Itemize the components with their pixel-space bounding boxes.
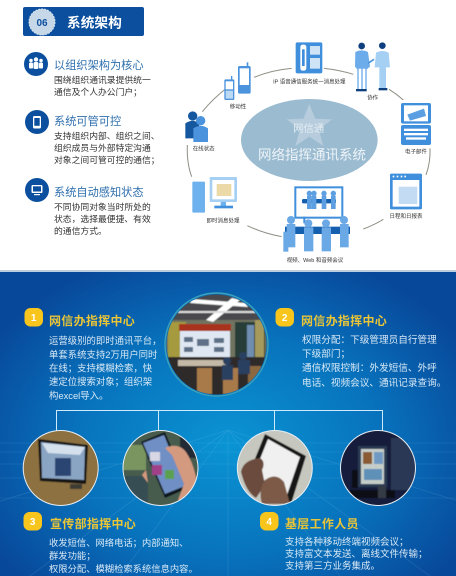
feature: organization core — [24, 52, 151, 97]
photo: desktop computer — [340, 428, 416, 508]
feature: organization core: 通信及个人办公门户； — [54, 86, 142, 97]
photo: smartphone in hand — [122, 430, 198, 506]
icon: collaboration people — [355, 42, 390, 91]
panel 3: publicity department: 收发短信、网络电话；内部通知、 — [49, 537, 188, 548]
badge 4 — [260, 512, 278, 530]
feature: organization core: 以组织架构为核心 — [54, 58, 144, 72]
panel 2: command center: 通信权限控制：外发短信、外呼 — [302, 362, 437, 374]
photo: video screen — [22, 430, 99, 506]
icon: email device — [401, 103, 431, 145]
photo: tablet typing — [236, 430, 313, 506]
icon: monitor — [25, 178, 49, 202]
connector lines — [56, 410, 382, 431]
panel 2: command center: 下级部门； — [302, 348, 350, 360]
badge 1: 1 — [31, 313, 37, 324]
panel 1: command center: 运营级别的即时通讯平台， — [49, 335, 162, 346]
label: email: 电子邮件 — [405, 148, 427, 156]
feature: controllable — [25, 110, 160, 165]
icon: video conference — [283, 187, 350, 252]
panel 2: command center — [276, 308, 446, 389]
badge 2: 2 — [282, 313, 288, 324]
central ellipse — [241, 99, 378, 181]
feature: presence awareness: 的通信方式。 — [54, 225, 107, 236]
photo: control room — [164, 292, 269, 397]
ring connectors — [187, 68, 430, 237]
label: mobile: 移动性 — [230, 103, 247, 111]
panel 1: command center — [24, 308, 162, 401]
panel 1: command center: 构excel导入。 — [49, 390, 108, 401]
label: video conference: 视频、Web 和音频会议 — [287, 256, 344, 264]
icon: calendar report — [390, 174, 422, 209]
icon: instant message computer — [192, 177, 237, 213]
feature: presence awareness — [25, 178, 151, 236]
header banner: 系统架构 — [67, 14, 122, 30]
label: IP phone: IP 语音通信服务统一消息处理 — [273, 77, 346, 85]
central ellipse: 网信通 — [293, 123, 324, 135]
panel 3: publicity department: 权限分配、模糊检索系统信息内容。 — [49, 563, 198, 574]
label: presence: 在线状态 — [193, 145, 215, 153]
icon: mobile devices — [224, 62, 251, 100]
panel 2: command center: 权限分配：下级管理员自行管理 — [302, 334, 437, 346]
icon: IP phone — [296, 42, 322, 73]
icon: mobile phone — [25, 110, 49, 134]
badge 3 — [24, 512, 42, 530]
panel 3: publicity department: 群发功能； — [49, 550, 96, 561]
feature: presence awareness: 系统自动感知状态 — [54, 185, 144, 199]
badge 3: 3 — [30, 517, 36, 528]
feature: presence awareness: 不同协同对象当时所处的 — [54, 201, 151, 212]
label: instant message: 即时消息处理 — [207, 217, 240, 225]
badge 2 — [276, 308, 294, 326]
feature: controllable: 系统可管可控 — [54, 114, 121, 128]
panel 1: command center: 速定位搜索对象；组织架 — [49, 376, 152, 387]
panel 2: command center: 电话、视频会议、通讯记录查询。 — [302, 377, 446, 389]
panel 4: grassroots staff: 支持第三方业务集成。 — [285, 560, 380, 572]
label: calendar report: 日程和日报表 — [390, 212, 423, 220]
feature: controllable: 支持组织内部、组织之间、 — [54, 130, 160, 141]
panel 4: grassroots staff: 基层工作人员 — [285, 516, 359, 531]
feature: organization core: 围绕组织通讯录提供统一 — [54, 74, 151, 85]
panel 2: command center: 网信办指挥中心 — [301, 313, 387, 328]
panel 1: command center: 在线；支持模糊检索，快 — [49, 362, 153, 374]
icon: presence people — [185, 111, 208, 142]
badge 4: 4 — [266, 517, 272, 528]
panel 4: grassroots staff: 支持富文本发送、离线文件传输； — [285, 548, 428, 560]
feature: presence awareness: 状态，选择最便捷、有效 — [54, 213, 151, 224]
feature: controllable: 组织成员与外部特定沟通 — [54, 142, 151, 153]
blue background panel — [0, 270, 456, 576]
icon: people — [24, 52, 48, 76]
panel 4: grassroots staff: 支持各种移动终端视频会议； — [285, 536, 409, 548]
central ellipse: 网络指挥通讯系统 — [258, 147, 366, 162]
panel 1: command center: 单套系统支持2万用户同时 — [49, 349, 157, 360]
panel 3: publicity department: 宣传部指挥中心 — [50, 516, 136, 531]
panel 1: command center: 网信办指挥中心 — [49, 313, 135, 328]
panel 3: publicity department — [24, 512, 198, 574]
label: collaboration: 协作 — [367, 93, 379, 101]
header banner — [23, 7, 144, 36]
header banner: 06 — [36, 18, 48, 29]
diagram: unified communication system — [185, 42, 431, 264]
feature: controllable: 对象之间可管可控的通信； — [54, 154, 160, 165]
panel 4: grassroots staff — [260, 512, 428, 572]
